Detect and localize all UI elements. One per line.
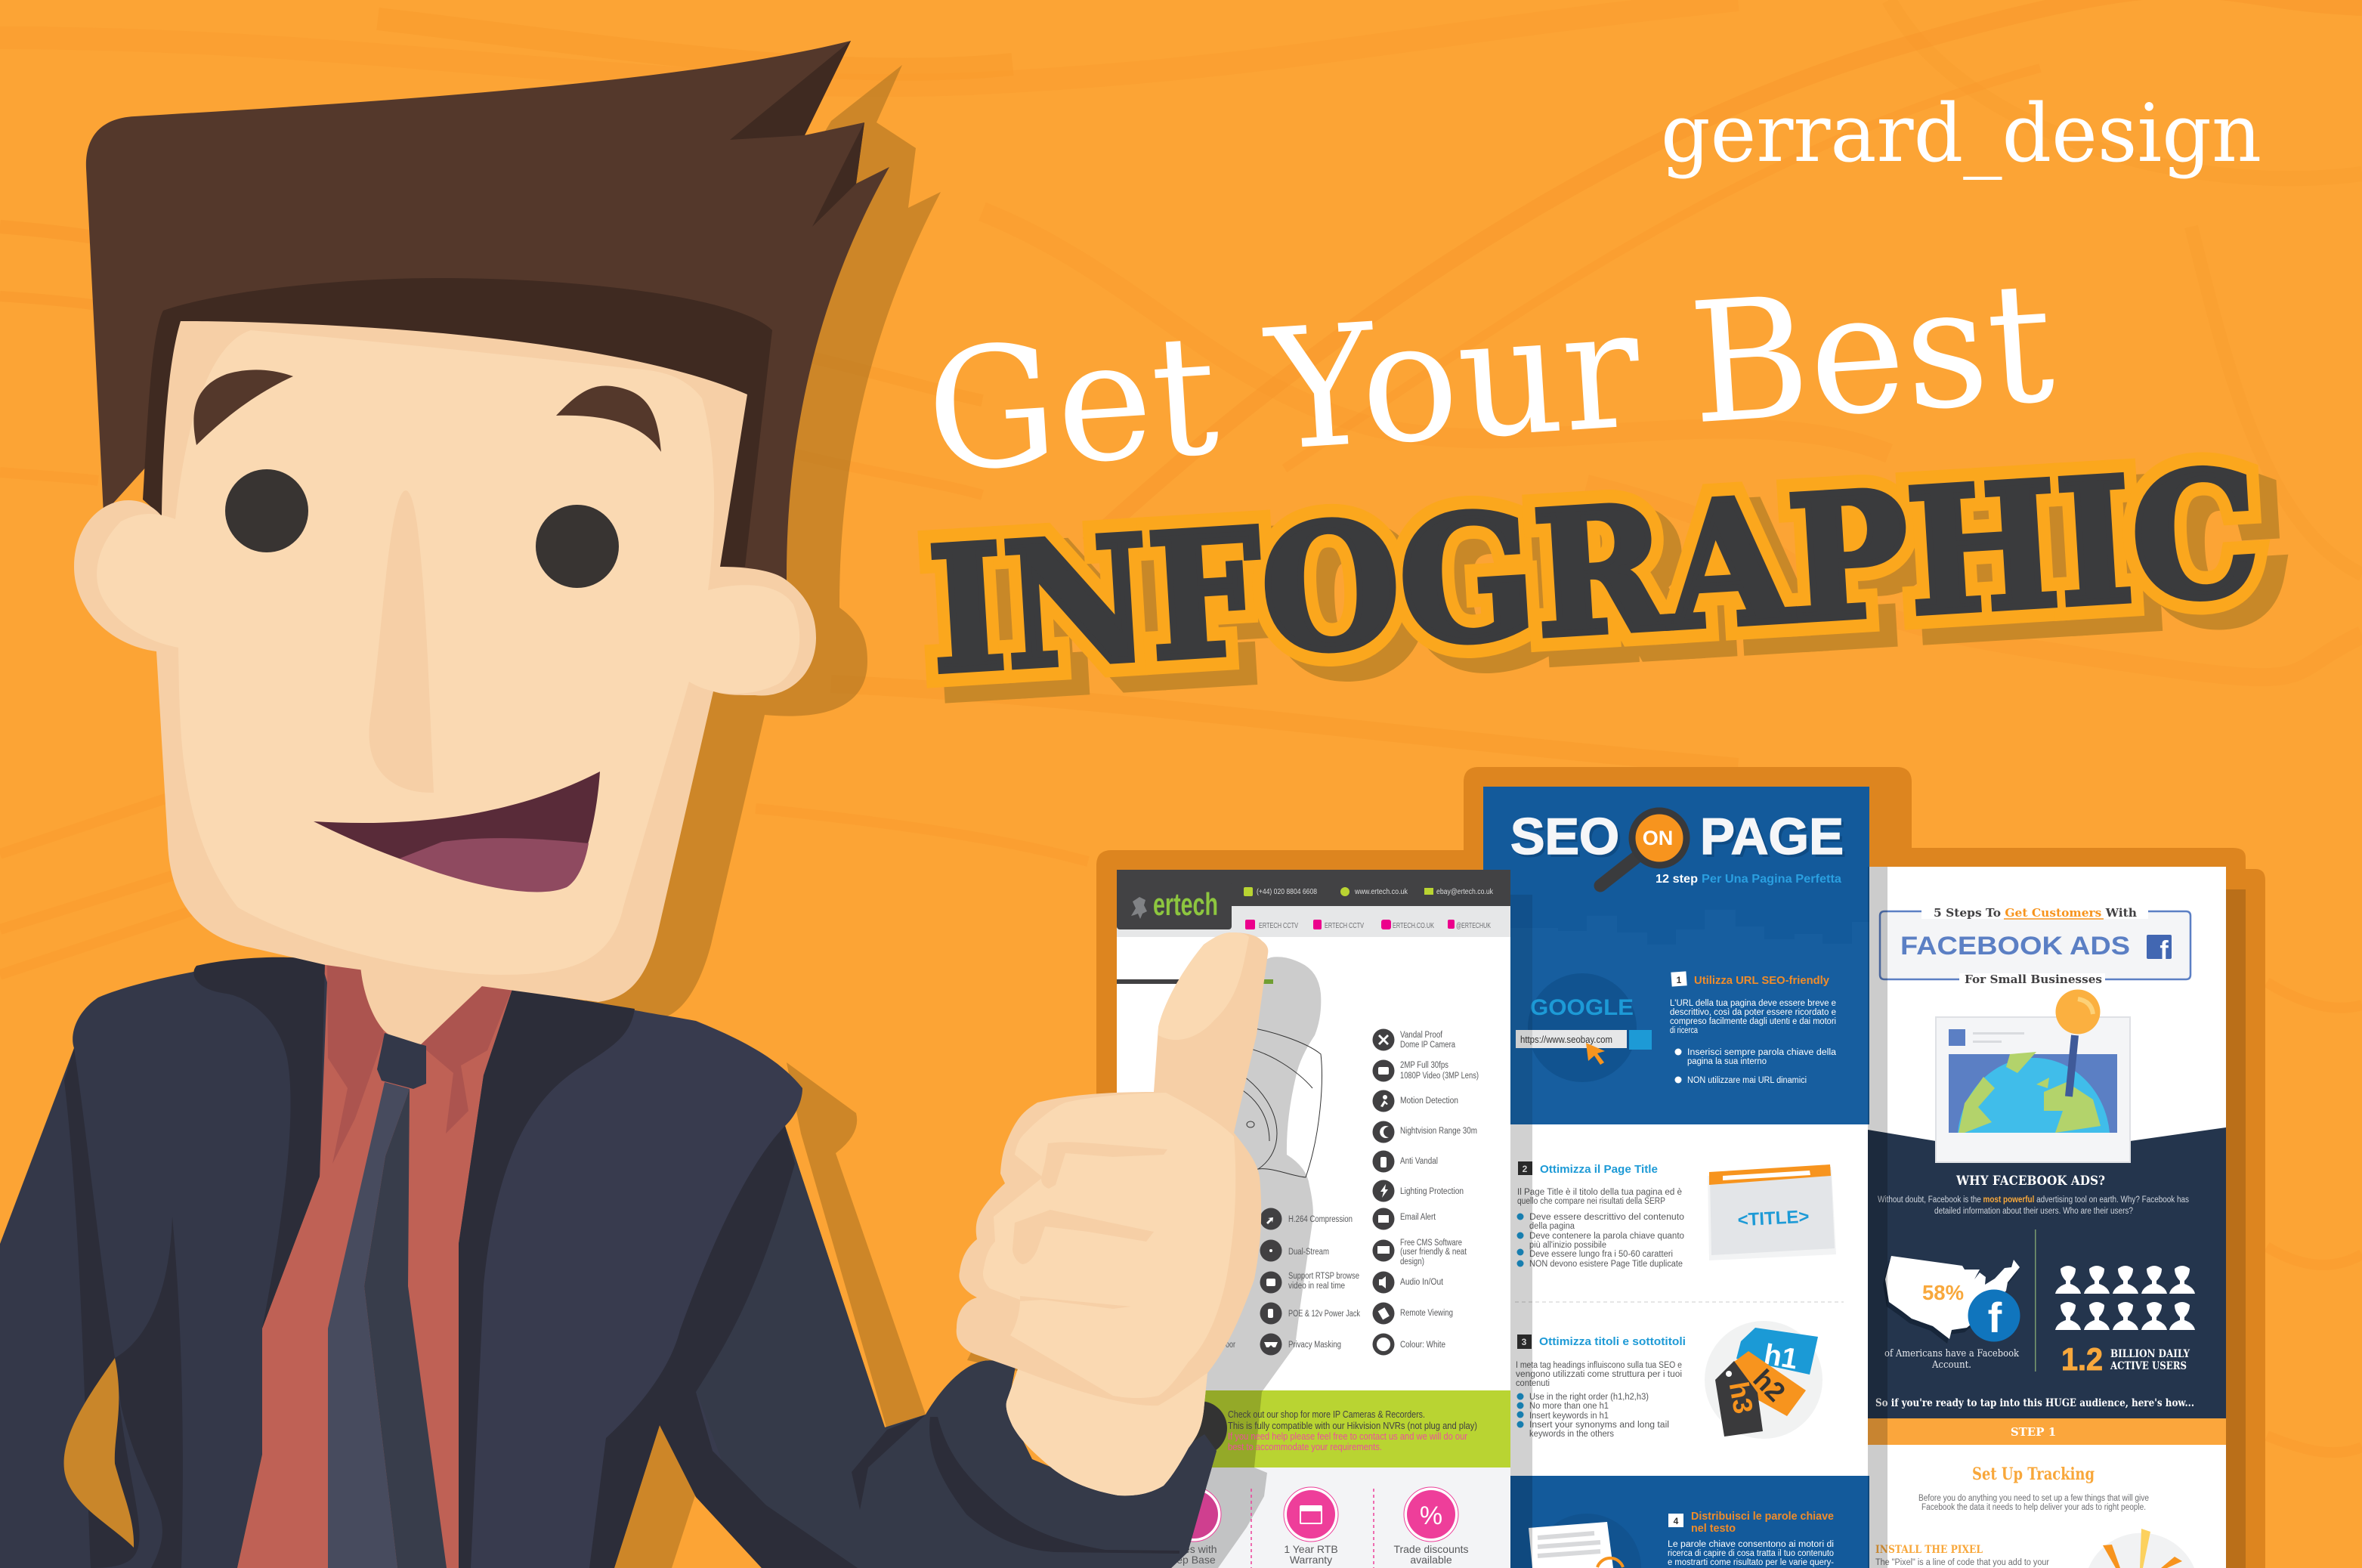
call to action: So if you're ready to tap into this HUGE audience, here's how...	[1875, 1397, 2194, 1409]
right feature labels	[1226, 1031, 1479, 1350]
map stat: 58 percent: f	[1988, 1294, 2002, 1341]
right feature labels: Free CMS Software	[1400, 1239, 1462, 1248]
panel: ertech camera infographic	[1117, 870, 1510, 1568]
right feature labels: Vandal Proof	[1400, 1031, 1443, 1040]
right feature labels: Nightvision Range 30m	[1400, 1127, 1477, 1136]
step 2: della pagina	[1529, 1222, 1575, 1231]
benefit labels	[1161, 1543, 1469, 1566]
step 1: compreso facilmente dagli utenti e dai motori	[1670, 1017, 1836, 1026]
divider	[2035, 1229, 2036, 1372]
set up tracking: Before you do anything you need to set up a few things that will give	[1918, 1494, 2149, 1503]
step 3: keywords in the others	[1529, 1430, 1614, 1439]
camera sketch	[1239, 1026, 1322, 1177]
illustration: document	[1529, 1514, 1641, 1568]
map stat: 58 percent: of Americans have a Facebook	[1884, 1348, 2019, 1359]
step 2: Il Page Title è il titolo della tua pagina ed è	[1517, 1188, 1682, 1197]
why facebook ads: detailed information about their users. Who are their users?	[1934, 1207, 2133, 1216]
step 4: nel testo	[1691, 1522, 1736, 1535]
right feature labels: Remote Viewing	[1400, 1309, 1453, 1318]
illustration: heading tags: h1	[1761, 1338, 1800, 1376]
eyes	[225, 469, 308, 552]
SEO heading: SEO	[1513, 811, 1622, 868]
benefit labels: Deep Base	[1163, 1554, 1216, 1566]
step 3: Use in the right order (h1,h2,h3)	[1529, 1393, 1649, 1402]
map stat: 58 percent: 58%	[1922, 1281, 1964, 1304]
face highlight	[97, 330, 799, 975]
step 2	[1517, 1161, 1684, 1269]
right feature labels: Lighting Protection	[1400, 1187, 1464, 1196]
step 4: e mostrarti come risultato per le varie query-	[1668, 1558, 1834, 1567]
step 4: 4	[1674, 1516, 1679, 1526]
icon: people grid	[2055, 1266, 2195, 1330]
step 1: 1	[1677, 975, 1682, 985]
social row: ERTECH CCTV	[1325, 922, 1364, 930]
tie	[328, 1033, 447, 1568]
step 1: L'URL della tua pagina deve essere breve e	[1670, 999, 1836, 1008]
benefit labels: Warranty	[1290, 1554, 1332, 1566]
character shadow	[529, 65, 1035, 1568]
neck and shirt	[237, 907, 521, 1568]
icon: magnifier ON: ON	[1643, 827, 1673, 849]
social row: ERTECH CCTV	[1259, 922, 1298, 930]
header box: For Small Businesses	[1965, 973, 2102, 986]
step 4: ricerca di capire di cosa tratta il tuo contenuto	[1668, 1549, 1834, 1558]
step 2: più all'inizio possibile	[1529, 1241, 1606, 1250]
header box: f	[2159, 936, 2169, 965]
step 1: pagina la sua interno	[1687, 1057, 1767, 1066]
step 1	[1670, 971, 1837, 1085]
frame: orange backing behind the infographic panels	[1096, 767, 2265, 1568]
right feature labels: H.264 Compression	[1288, 1215, 1353, 1224]
ears and face base	[74, 321, 816, 1002]
step 1: di ricerca	[1670, 1026, 1698, 1035]
finger creases	[1013, 1142, 1167, 1309]
right feature icons	[1260, 1029, 1395, 1356]
bottom strip	[1117, 1467, 1510, 1568]
panel: Facebook ads infographic	[1868, 867, 2226, 1568]
header box: 5 Steps To Get Customers With	[1934, 906, 2137, 920]
benefit labels: Comes with	[1161, 1543, 1217, 1555]
dashed dividers	[1251, 1489, 1374, 1568]
right feature labels: 2MP Full 30fps	[1400, 1061, 1448, 1070]
stat: 1.2 billion: BILLION DAILY	[2110, 1348, 2190, 1360]
stat: 1.2 billion	[2061, 1341, 2190, 1377]
step 2: Deve contenere la parola chiave quanto	[1529, 1232, 1684, 1241]
set up tracking: The "Pixel" is a line of code that you add to your	[1875, 1558, 2049, 1567]
panel shadows	[1510, 867, 2246, 1568]
step 1 band: STEP 1	[2011, 1425, 2056, 1439]
palm highlight	[983, 1093, 1235, 1398]
illustration: browser title	[1708, 1164, 1836, 1260]
illustration: gauge	[2088, 1529, 2194, 1568]
right feature labels: design)	[1400, 1257, 1424, 1266]
illustration: heading tags: h3	[1724, 1379, 1759, 1416]
step 3: I meta tag headings influiscono sulla tua SEO e	[1516, 1361, 1682, 1370]
right eye	[536, 505, 619, 588]
step 4: Distribuisci le parole chiave	[1691, 1510, 1834, 1523]
SEO heading: PAGE	[1700, 808, 1844, 865]
social row: ERTECH.CO.UK	[1393, 922, 1434, 930]
why facebook ads	[1878, 1174, 2189, 1216]
right feature labels: Support RTSP browse	[1288, 1272, 1359, 1281]
title word: INFOGRAPHIC: INFOGRAPHIC	[924, 433, 2264, 712]
pink benefit circles	[1167, 1487, 1458, 1542]
logo block	[1117, 882, 1232, 929]
step 4: Le parole chiave consentono ai motori di	[1668, 1540, 1834, 1549]
nose	[369, 490, 434, 793]
step 3: contenuti	[1516, 1379, 1550, 1388]
step 3	[1516, 1335, 1686, 1439]
illustration: heading tags: h2	[1747, 1363, 1792, 1408]
header box	[1880, 904, 2190, 987]
social row: @ERTECHUK	[1456, 922, 1491, 930]
title line: Get Your Best: Get Your Best	[921, 246, 2058, 509]
character: businessman	[0, 41, 1268, 1568]
jacket right	[459, 989, 1217, 1568]
google search illustration: GOOGLE	[1530, 995, 1634, 1020]
right feature labels: Dual-Stream	[1288, 1248, 1329, 1257]
step 3: No more than one h1	[1529, 1402, 1609, 1411]
stat: 1.2 billion: ACTIVE USERS	[2110, 1360, 2187, 1372]
stat: 1.2 billion: 1.2	[2061, 1341, 2103, 1377]
wrist highlight	[1006, 1369, 1207, 1495]
step 3: Insert keywords in h1	[1529, 1412, 1609, 1421]
hair	[86, 41, 889, 580]
step 1 band	[1868, 1418, 2226, 1445]
right feature labels: Email Alert	[1400, 1213, 1436, 1222]
SEO heading: PAGE	[1703, 811, 1847, 868]
right feature labels: oor	[1226, 1341, 1235, 1350]
google search illustration: https://www.seobay.com	[1520, 1035, 1612, 1045]
social bar	[1117, 906, 1510, 937]
right feature labels: 1080P Video (3MP Lens)	[1400, 1072, 1479, 1081]
heading rule	[1117, 979, 1268, 984]
right feature labels: POE & 12v Power Jack	[1288, 1310, 1360, 1319]
promo text: best to accommodate your requirements.	[1228, 1441, 1382, 1452]
right feature labels: Anti Vandal	[1400, 1157, 1438, 1166]
step 1: descrittivo, così da poter essere ricordato e	[1670, 1008, 1836, 1017]
right feature labels: video in real time	[1288, 1282, 1345, 1291]
brand name: gerrard_design	[1661, 87, 2262, 180]
step 4	[1668, 1510, 1834, 1567]
tongue	[400, 838, 589, 892]
right feature labels: Colour: White	[1400, 1341, 1445, 1350]
promo text: Check out our shop for more IP Cameras & Recorders.	[1228, 1409, 1425, 1420]
subtitle: 12 step	[1656, 873, 1698, 886]
title word: INFOGRAPHIC: INFOGRAPHIC	[942, 448, 2282, 727]
step 3: Ottimizza titoli e sottotitoli	[1539, 1335, 1686, 1348]
step 1: Utilizza URL SEO-friendly	[1694, 974, 1830, 987]
illustration: browser title: <TITLE>	[1737, 1207, 1810, 1230]
mouth	[314, 772, 600, 890]
step 2: Deve essere lungo fra i 50-60 caratteri	[1529, 1250, 1673, 1259]
promo text: If you need help please feel free to contact us and we will do our	[1228, 1430, 1468, 1442]
white section	[1510, 1124, 1869, 1476]
step 1: Inserisci sempre parola chiave della	[1687, 1048, 1837, 1057]
step 2: Deve essere descrittivo del contenuto	[1529, 1213, 1684, 1222]
dashed separator	[1515, 1301, 1844, 1303]
set up tracking	[1875, 1464, 2149, 1567]
step 2: 2	[1523, 1164, 1528, 1174]
header bar	[1117, 870, 1510, 906]
skyline	[1483, 910, 1869, 1124]
google search illustration	[1516, 973, 1652, 1082]
head	[74, 41, 889, 1002]
panel: SEO on page infographic	[1483, 787, 1869, 1568]
map stat: 58 percent	[1883, 1256, 2020, 1371]
set up tracking: INSTALL THE PIXEL	[1875, 1544, 1983, 1556]
SEO heading: SEO	[1510, 808, 1619, 865]
promo text: This is fully compatible with our Hikvision NVRs (not plug and play)	[1228, 1420, 1477, 1431]
promo icon: dark badge	[1173, 1401, 1227, 1455]
contact row: (+44) 020 8804 6608	[1257, 888, 1317, 896]
set up tracking: Facebook the data it needs to help deliver your ads to right people.	[1921, 1503, 2146, 1512]
step 3: vengono utilizzati come struttura per i tuoi	[1516, 1370, 1682, 1379]
benefit labels: 1 Year RTB	[1284, 1543, 1338, 1555]
promo text	[1228, 1409, 1477, 1452]
illustration: heading tags	[1705, 1321, 1823, 1439]
hair spike shading	[730, 41, 864, 227]
benefit labels: Trade discounts	[1393, 1543, 1469, 1555]
SEO heading	[1510, 808, 1847, 868]
step 2: quello che compare nei risultati della SERP	[1517, 1197, 1665, 1206]
header box: FACEBOOK ADS	[1900, 932, 2130, 960]
right feature labels: Audio In/Out	[1400, 1278, 1444, 1287]
subtitle: Per Una Pagina Perfetta	[1702, 873, 1841, 886]
why facebook ads: WHY FACEBOOK ADS?	[1955, 1174, 2105, 1189]
step 3: 3	[1522, 1337, 1527, 1347]
step 3: Insert your synonyms and long tail	[1529, 1421, 1669, 1430]
why facebook ads: Without doubt, Facebook is the most powerful advertising tool on earth. Why? Facebook has	[1878, 1195, 2189, 1205]
icon: magnifier ON	[1600, 811, 1686, 886]
pocket gap	[64, 1358, 134, 1548]
right feature labels: Motion Detection	[1400, 1096, 1458, 1106]
social row	[1245, 920, 1491, 930]
contact row	[1244, 887, 1494, 896]
set up tracking: Set Up Tracking	[1972, 1464, 2095, 1484]
hand shadow on panel	[1133, 957, 1321, 1568]
step 1: NON utilizzare mai URL dinamici	[1687, 1076, 1807, 1085]
fringe shadow	[143, 278, 772, 567]
right feature labels: Privacy Masking	[1288, 1341, 1341, 1350]
illustration: globe card and pin	[1936, 990, 2130, 1162]
benefit labels: available	[1410, 1554, 1452, 1566]
logo block: ertech	[1153, 886, 1218, 922]
contact row: ebay@ertech.co.uk	[1436, 888, 1494, 896]
eyebrows	[193, 370, 661, 452]
jacket left	[0, 957, 327, 1568]
navy section	[1868, 1127, 2226, 1418]
title word: INFOGRAPHIC: INFOGRAPHIC	[924, 433, 2264, 712]
map stat: 58 percent: Account.	[1931, 1359, 1971, 1371]
contact row: www.ertech.co.uk	[1354, 888, 1408, 896]
thumb highlight	[1158, 932, 1249, 1040]
hand thumbs up	[957, 932, 1268, 1495]
green promo band	[1117, 1390, 1510, 1467]
right feature labels: (user friendly & neat	[1400, 1248, 1467, 1257]
pink benefit circles: %	[1420, 1502, 1442, 1530]
step 2: NON devono esistere Page Title duplicate	[1529, 1260, 1683, 1269]
blue section step 4	[1510, 1476, 1869, 1568]
step 2: Ottimizza il Page Title	[1540, 1163, 1658, 1176]
right feature labels: Dome IP Camera	[1400, 1041, 1455, 1050]
